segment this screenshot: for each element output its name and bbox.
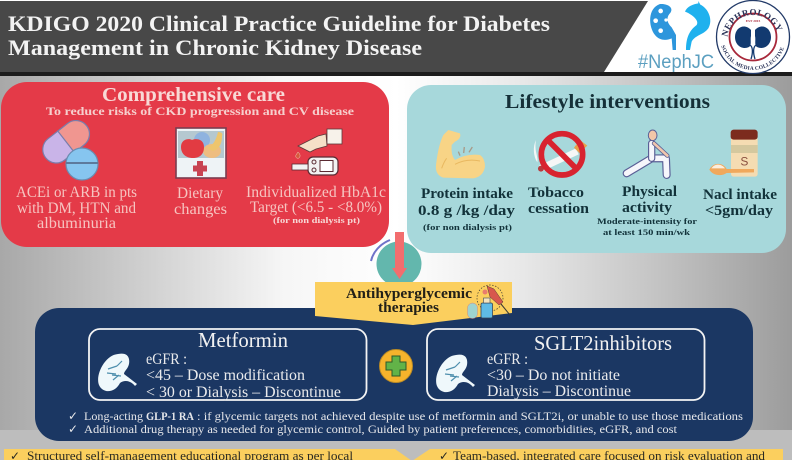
- note: moderate intensity: at least 150 min/wk: [603, 227, 690, 237]
- text: ACEi: albuminuria: [37, 215, 116, 232]
- banner: [315, 282, 512, 325]
- text: physical activity: activity: [622, 200, 673, 216]
- heading: Comprehensive care: [102, 84, 285, 106]
- bullet list: [68, 409, 743, 436]
- text: [146, 351, 341, 401]
- logo: nephrology social media collective: EST 2015: [746, 19, 760, 23]
- text: tobacco: cessation: [528, 201, 590, 217]
- note: non dialysis: (for non dialysis pt): [273, 215, 360, 225]
- icon: flexed arm: [436, 130, 485, 178]
- heading: [346, 286, 472, 316]
- hashtag: #NephJC: [638, 52, 714, 73]
- text: nacl: <5gm/day: [705, 203, 774, 219]
- icon: salt jar: [709, 130, 758, 177]
- text: eGFR :: [487, 351, 528, 368]
- text: protein: 0.8 g /kg /day: [418, 203, 516, 219]
- title: [8, 11, 550, 60]
- bullet list: Additional drug therapy as needed for glycemic control, Guided by patient preferences, comorbidities, eGFR, and cost: [84, 422, 678, 436]
- heading: Metformin: [198, 328, 288, 352]
- logo: nephrology social media collective: SOCIAL MEDIA COLLECTIVE: [721, 45, 784, 70]
- text: [487, 351, 631, 400]
- text: <30 – Do not initiate: [487, 367, 620, 384]
- logo: nephrology social media collective: [716, 0, 790, 74]
- icon: no smoking: [534, 134, 587, 175]
- text: protein: Protein intake: [421, 186, 513, 202]
- icon: glucose meter: [292, 129, 342, 175]
- text: ACEi: ACEi or ARB in pts: [16, 184, 137, 201]
- subheading: To reduce risks of CKD progression and CV disease: [46, 104, 355, 118]
- text: dietary: Dietary: [177, 185, 223, 202]
- bullet list: GLP-1 RA: [146, 409, 194, 423]
- text: ACEi: with DM, HTN and: [17, 200, 136, 217]
- heading: therapies: [378, 300, 439, 316]
- text: physical activity: Physical: [622, 184, 677, 200]
- icon: food box: [176, 128, 226, 178]
- text: protein: [418, 186, 516, 219]
- text: eGFR :: [146, 351, 187, 368]
- text: <45 – Dose modification: [146, 367, 305, 384]
- icon: kidney: [436, 355, 475, 392]
- heading: SGLT2inhibitors: [534, 331, 672, 355]
- bullet list: ✓: [68, 409, 78, 423]
- box: sglt2: [427, 329, 704, 400]
- bullet list: : if glycemic targets not achieved despite use of metformin and SGLT2i, or unable to use those medications: [197, 409, 743, 423]
- note: non dialysis: (for non dialysis pt): [423, 222, 512, 232]
- text: tobacco: Tobacco: [528, 185, 584, 201]
- note: moderate intensity: [597, 216, 697, 237]
- text: physical activity: [622, 184, 677, 216]
- text: ACEi: [16, 184, 137, 232]
- bullet list: Long-acting: [84, 409, 143, 423]
- text: dietary: [174, 185, 227, 218]
- icon: pills: [37, 115, 98, 180]
- icon: kidney: [98, 354, 137, 391]
- note: moderate intensity: Moderate-intensity for: [597, 216, 697, 226]
- text: < 30 or Dialysis – Discontinue: [146, 384, 341, 401]
- panel: lifestyle interventions: [407, 85, 786, 253]
- title: KDIGO 2020 Clinical Practice Guideline for Diabetes: [8, 11, 550, 36]
- icon: plus: [380, 350, 412, 382]
- panel: antihyperglycemic therapies: [35, 232, 753, 441]
- icon: insulin: [468, 285, 510, 318]
- text: nacl: [703, 187, 777, 219]
- bullet list: ✓: [68, 422, 78, 436]
- text: tobacco: [528, 185, 590, 217]
- text: HbA1c: [246, 184, 386, 216]
- header banner: [0, 0, 792, 76]
- text: nacl: Nacl intake: [703, 187, 777, 203]
- logo: NephJC: [638, 1, 714, 73]
- icon: stretching person: [627, 130, 667, 175]
- text: HbA1c: Target (<6.5 - <8.0%): [250, 199, 382, 216]
- icon: salt jar: S: [740, 155, 748, 169]
- heading: Lifestyle interventions: [505, 91, 710, 113]
- text: HbA1c: Individualized HbA1c: [246, 184, 386, 201]
- text: dietary: changes: [174, 201, 227, 218]
- logo: nephrology social media collective: NEPHROLOGY: [722, 9, 783, 37]
- text: Dialysis – Discontinue: [487, 383, 631, 400]
- circle and arrow: [371, 232, 422, 286]
- box: metformin: [89, 328, 366, 401]
- heading: Antihyperglycemic: [346, 286, 472, 302]
- panel: comprehensive care: [1, 82, 389, 247]
- title: Management in Chronic Kidney Disease: [8, 35, 422, 60]
